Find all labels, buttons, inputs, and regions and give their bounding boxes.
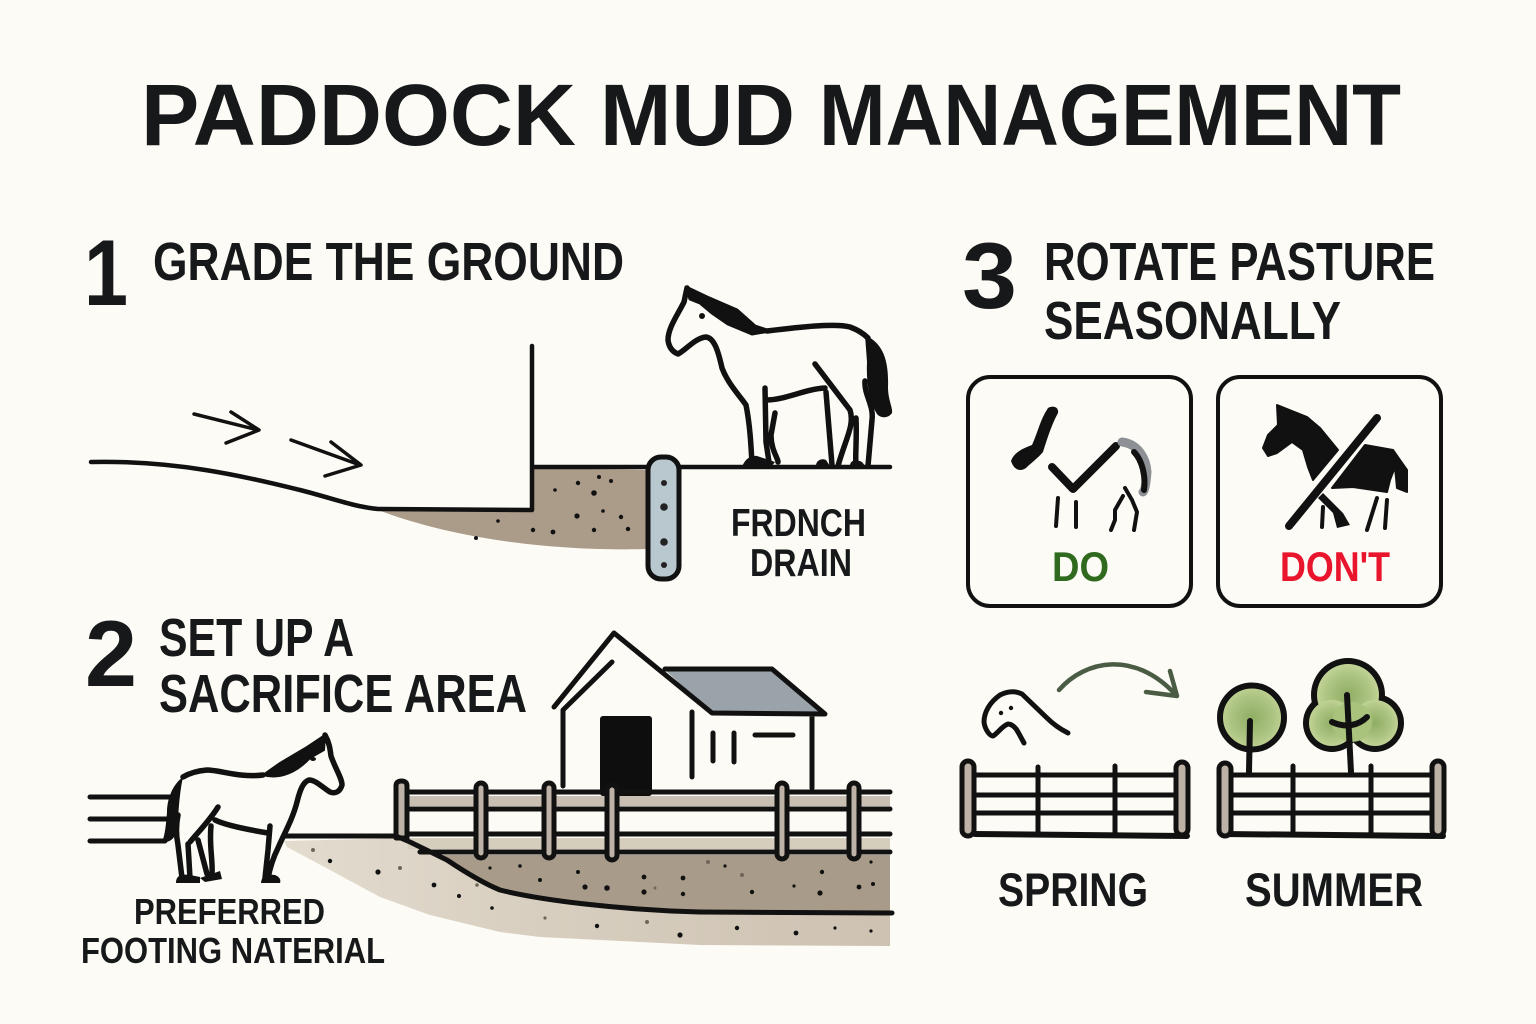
arrow: runoff 2: [291, 440, 361, 476]
fence: summer: [1219, 761, 1444, 836]
left rail fence: [90, 797, 170, 841]
icon: spring horse head: [984, 692, 1068, 743]
ground surface line: [285, 836, 892, 913]
title: MANAGEMENT: [819, 67, 1401, 164]
arrow: spring to summer: [1059, 664, 1177, 696]
heading: set up a sacrifice area: [159, 608, 527, 724]
label: spring: SPRING: [998, 863, 1148, 916]
panel: step 2 sacrifice area: [81, 601, 892, 971]
arrow: runoff 1: [194, 412, 259, 443]
panel: step 3 rotate pasture: [962, 223, 1444, 916]
heading: rotate pasture seasonally: ROTATE PASTURE: [1044, 232, 1435, 292]
icon: barn: [554, 633, 825, 796]
summer pasture: [1219, 658, 1444, 916]
panel: step 1 grade the ground: [84, 220, 892, 585]
label: do: DO: [1052, 543, 1109, 590]
title: MUD: [600, 67, 795, 164]
sand footing layer: [284, 838, 890, 946]
label: preferred footing material: PREFERRED: [134, 891, 325, 932]
icon: french drain pipe: [648, 457, 679, 579]
label: french drain: [731, 502, 866, 585]
heading: set up a sacrifice area: SET UP A: [159, 608, 354, 668]
icon: large tree: [1303, 658, 1404, 772]
label: preferred footing material: FOOTING NATERIAL: [81, 930, 385, 971]
label: preferred footing material: [81, 891, 385, 971]
icon: horse tail and legs: [1056, 442, 1147, 530]
title: PADDOCK: [141, 67, 576, 164]
step number 2: 2: [85, 601, 137, 706]
heading: rotate pasture seasonally: [1044, 232, 1435, 351]
graded slope line and wall: [91, 346, 890, 510]
icon: crossed out horse: [1263, 405, 1407, 530]
card: don't: [1218, 377, 1441, 606]
icon: horse standing: [668, 287, 892, 468]
icon: horse head fragment: [1011, 407, 1058, 470]
heading: rotate pasture seasonally: SEASONALLY: [1044, 291, 1341, 351]
fence: paddock fence: [396, 781, 890, 860]
step number 3: 3: [962, 223, 1017, 328]
label: french drain: FRDNCH: [731, 502, 866, 545]
icon: small tree: [1220, 686, 1284, 772]
icon: check mark: [1052, 446, 1116, 489]
fence: spring: [962, 761, 1188, 836]
label: french drain: DRAIN: [750, 542, 852, 585]
title: [141, 67, 1401, 164]
icon: horse at sacrifice area: [162, 735, 342, 883]
label: summer: SUMMER: [1245, 863, 1423, 916]
step number 1: 1: [84, 220, 128, 325]
spring pasture: [962, 664, 1188, 916]
soil cross-section: [378, 468, 650, 549]
label: don't: DON'T: [1280, 543, 1390, 590]
card: do: [968, 377, 1191, 606]
heading: set up a sacrifice area: SACRIFICE AREA: [159, 664, 527, 724]
heading: grade the ground: GRADE THE GROUND: [153, 232, 624, 292]
